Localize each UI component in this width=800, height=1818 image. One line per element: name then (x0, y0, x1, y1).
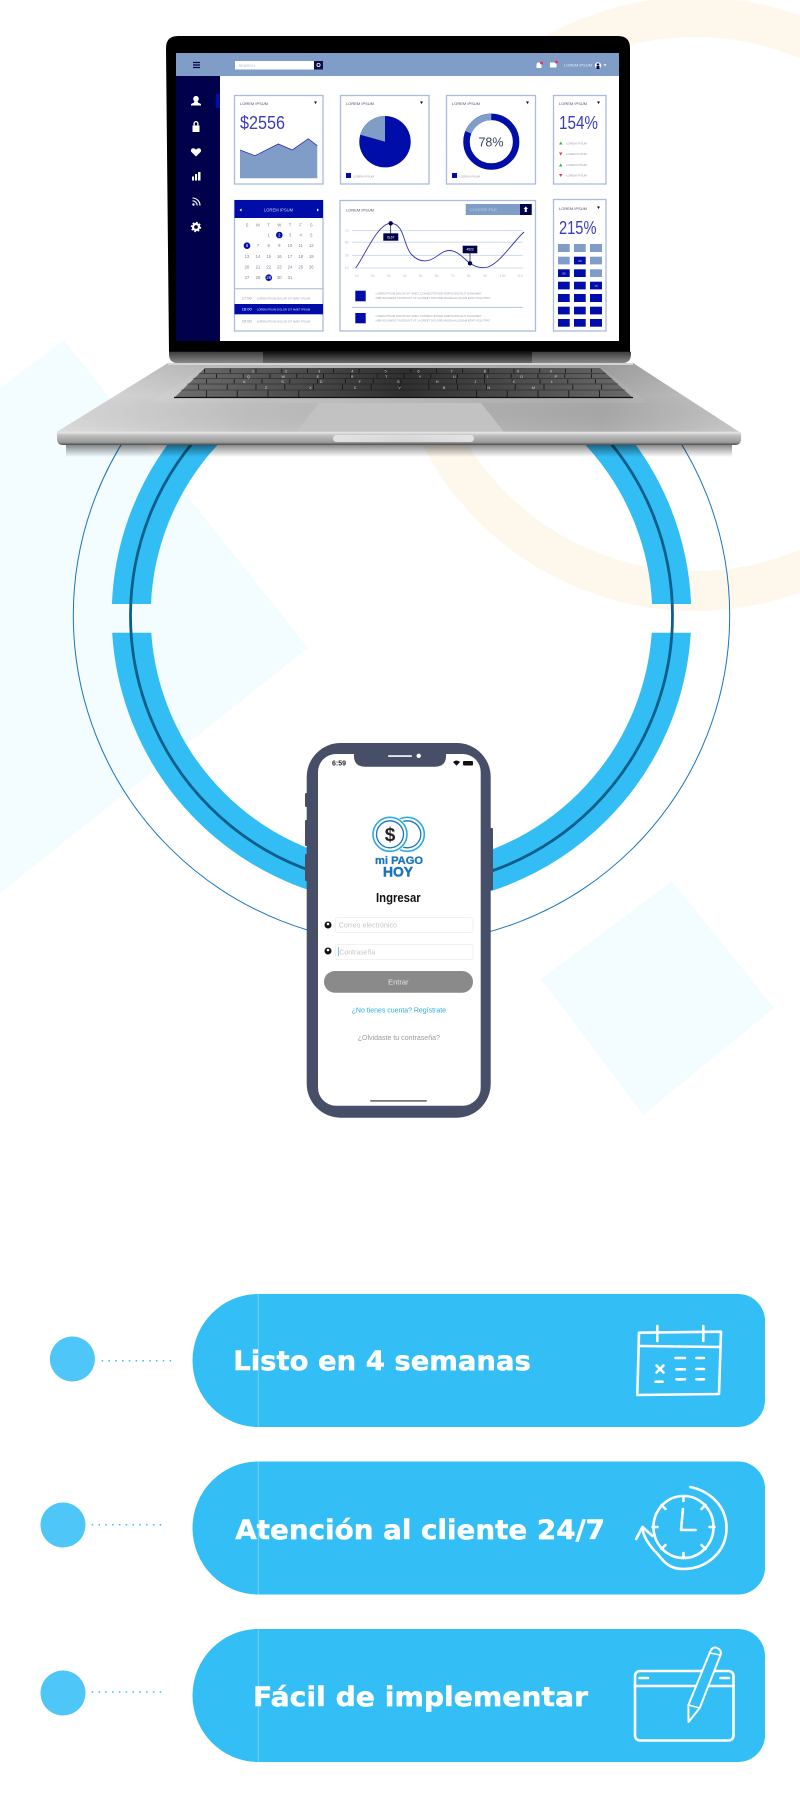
card: calendar: 12 (309, 243, 314, 248)
card: 154 percent: LOREM IPSUM (566, 174, 588, 178)
dashboard sidebar (176, 76, 220, 341)
pill background (192, 1462, 765, 1594)
card: heat grid: 215% (559, 218, 596, 238)
password field: Contraseña (339, 948, 376, 956)
card: calendar: 16 (277, 254, 282, 259)
card: calendar (234, 200, 323, 331)
card: line chart: NIBH EUISMOD TINCIDUNT UT LAOREET DOLORE MAGNA ALIQUAM ERAT VOLUTPAT (376, 320, 491, 322)
card: calendar: LOREM IPSUM DOLOR SIT AMET IPSUM (257, 319, 311, 323)
card: calendar: 21 (256, 264, 261, 270)
card: calendar: W (277, 222, 281, 228)
forgot password link: ¿Olvidaste tu contraseña? (358, 1033, 440, 1042)
card: 154 percent: LOREM IPSUM (566, 152, 588, 156)
card: calendar: LOREM IPSUM DOLOR SIT AMET IPSUM (257, 296, 311, 300)
card: calendar: 7 (257, 243, 260, 248)
card: line chart: 4523 (466, 248, 474, 252)
feature row 3: facil de implementar (40, 1629, 765, 1762)
card: calendar: 18 (298, 254, 304, 259)
card: line chart: 10 (345, 266, 349, 270)
laptop front lip (57, 432, 741, 445)
card: heat grid: 70 (594, 284, 598, 288)
card: calendar: 17 (288, 254, 293, 259)
dashboard header bar (176, 53, 619, 76)
bullet with dotted connector (40, 1670, 164, 1716)
card: line chart: 60 (435, 274, 439, 278)
laptop keyboard (174, 368, 633, 398)
card: line chart: 50 (345, 240, 349, 244)
card: line chart: CHOOSE FILE (470, 207, 497, 212)
concentric rings behind the devices (72, 445, 730, 932)
logo: Mi Pago Hoy: HOY (383, 864, 414, 880)
card: calendar: 18:00 (242, 306, 252, 312)
card: 154 percent: LOREM IPSUM (559, 101, 587, 106)
laptop screen dashboard (176, 53, 619, 341)
icon: calendar (637, 1326, 721, 1395)
card: line chart: 100 (500, 274, 506, 278)
card: line chart: 40 (403, 274, 407, 278)
dashboard header bar: SEARCH (238, 63, 255, 68)
card: line chart: 10 (355, 274, 359, 278)
card: donut chart (446, 96, 536, 184)
card: calendar: 25 (298, 264, 304, 270)
card: calendar: LOREM IPSUM DOLOR SIT AMET IPSUM (257, 308, 311, 312)
card: line chart: 30 (387, 274, 391, 278)
card: line chart: 30 (345, 254, 349, 258)
card: calendar: 14 (256, 254, 261, 259)
icon: lock (192, 121, 200, 132)
pill text: Listo en 4 semanas (233, 1346, 531, 1377)
card: calendar: 17:00 (242, 295, 252, 300)
card: pie chart: LOREM IPSUM (346, 101, 374, 106)
laptop keyboard: Q W E R T Y U I O P (247, 375, 558, 379)
icon: feed dot (192, 203, 195, 206)
phone screen (318, 754, 481, 1106)
pill text: Fácil de implementar (253, 1682, 589, 1713)
laptop keyboard: A S D F G H J K L (243, 380, 553, 384)
card: line chart: LOREM IPSUM DOLOR SIT AMET, CONSECTETUER ADIPISCING ELIT NONUMMY (376, 315, 482, 318)
laptop base top surface (57, 363, 740, 436)
card: line chart: 6L67 (387, 235, 395, 239)
background shape: pale cyan diamond left (0, 340, 308, 893)
submit button (324, 971, 473, 993)
card: calendar: 20 (245, 264, 250, 270)
phone notch (354, 754, 446, 767)
icon: settings gear (192, 222, 200, 232)
card: calendar: 2 (278, 232, 281, 238)
card: line chart: 50 (419, 274, 423, 278)
bullet with dotted connector (40, 1502, 164, 1548)
card: line chart: 70 (451, 274, 455, 278)
phone side buttons (305, 793, 493, 890)
card: calendar: LOREM IPSUM (264, 208, 294, 212)
icon: feed (192, 198, 200, 206)
card: 154 percent: LOREM IPSUM (566, 142, 588, 146)
card: donut chart: 78% (478, 136, 504, 150)
phone status bar (332, 758, 473, 768)
submit button: Entrar (388, 978, 409, 987)
icon: heart (191, 148, 201, 156)
background shape: pale orange ring (408, 17, 800, 591)
icon: user (191, 96, 201, 106)
card: 154 percent (554, 96, 606, 184)
card: calendar: 29 (266, 275, 272, 280)
card: donut chart: LOREM IPSUM (452, 101, 480, 106)
card: calendar: 19:00 (242, 318, 252, 323)
card: calendar: 22 (266, 264, 272, 270)
card: calendar: 23 (277, 264, 282, 270)
card: calendar: 6 (246, 243, 249, 248)
feature row 2: atencion al cliente 24/7 (40, 1462, 765, 1594)
pill text: Atención al cliente 24/7 (235, 1515, 605, 1546)
home indicator (370, 1100, 427, 1102)
card: 154 percent: 154% (559, 113, 598, 133)
email field: Correo electrónico (339, 920, 397, 930)
logo: Mi Pago Hoy (372, 816, 424, 880)
password field (324, 944, 473, 960)
card: calendar: S (310, 222, 313, 228)
card: calendar: S (246, 222, 249, 228)
card: pie chart (340, 96, 429, 184)
laptop keyboard: Z X C V B N M (265, 386, 535, 390)
card: donut chart: LOREM IPSUM (459, 174, 481, 178)
card: heat grid: 85 (562, 271, 566, 275)
register link: ¿No tienes cuenta? Regístrate (352, 1006, 446, 1015)
card: calendar: 19 (309, 254, 314, 259)
card: revenue (234, 96, 323, 184)
card: line chart: 110 (517, 274, 523, 278)
card: line chart: 20 (371, 274, 375, 278)
card: revenue: $2556 (240, 113, 285, 133)
card: calendar: 11 (299, 243, 304, 248)
background shape: pale cyan diamond right (541, 881, 774, 1115)
card: line chart: 70 (345, 229, 349, 233)
card: heat grid (554, 200, 606, 331)
card: calendar: 30 (277, 275, 282, 280)
card: calendar: F (299, 222, 302, 228)
card: calendar: 28 (256, 275, 261, 280)
email field (324, 918, 473, 932)
card: line chart: LOREM IPSUM (346, 208, 374, 212)
card: heat grid: LOREM IPSUM (559, 206, 587, 211)
card: calendar: T (289, 222, 292, 228)
laptop keyboard: 1 2 3 4 5 6 7 8 9 0 (252, 370, 552, 374)
laptop shadow (66, 444, 732, 457)
bullet with dotted connector (50, 1336, 174, 1382)
card: calendar: 5 (310, 232, 313, 238)
feature row 1: listo en 4 semanas (50, 1294, 765, 1427)
card: revenue: LOREM IPSUM (240, 101, 268, 106)
phone status bar: 6:59 (332, 758, 346, 768)
icon: clock (636, 1487, 726, 1569)
card: calendar: 4 (300, 232, 303, 238)
card: calendar: 8 (268, 243, 271, 248)
icon: window with pen (635, 1648, 734, 1740)
card: line chart (340, 200, 536, 331)
card: 154 percent: LOREM IPSUM (566, 163, 588, 167)
card: calendar: 10 (288, 243, 293, 248)
card: calendar: 15 (266, 254, 272, 259)
laptop (57, 36, 741, 457)
card: calendar: 26 (309, 264, 314, 270)
icon: signal bars (192, 172, 200, 180)
card: pie chart: LOREM IPSUM (353, 174, 375, 178)
card: line chart: 80 (467, 274, 471, 278)
laptop lid (166, 36, 631, 363)
phone body (307, 743, 491, 1118)
login heading: Ingresar (376, 890, 421, 905)
dashboard header bar: LOREM IPSUM (564, 62, 592, 68)
card: calendar: M (256, 222, 260, 228)
card: calendar: 27 (245, 275, 250, 280)
card: calendar: 13 (245, 254, 250, 259)
card: calendar: 31 (288, 275, 293, 280)
card: calendar: T (267, 222, 270, 228)
card: line chart: NIBH EUISMOD TINCIDUNT UT LAOREET DOLORE MAGNA ALIQUAM ERAT VOLUTPAT (376, 297, 491, 300)
phone (305, 743, 493, 1118)
card: line chart: 90 (483, 274, 487, 278)
pill background (192, 1294, 765, 1427)
pill background (192, 1629, 765, 1762)
card: calendar: 9 (278, 243, 281, 248)
logo: Mi Pago Hoy: mi PAGO (375, 855, 423, 867)
logo: Mi Pago Hoy: $ (385, 825, 396, 846)
card: calendar: 24 (288, 264, 293, 270)
card: line chart: LOREM IPSUM DOLOR SIT AMET, CONSECTETUER ADIPISCING ELIT NONUMMY (376, 292, 482, 296)
card: calendar: 1 (268, 232, 271, 238)
card: calendar: 3 (289, 232, 292, 238)
card: heat grid: 60 (578, 259, 582, 263)
